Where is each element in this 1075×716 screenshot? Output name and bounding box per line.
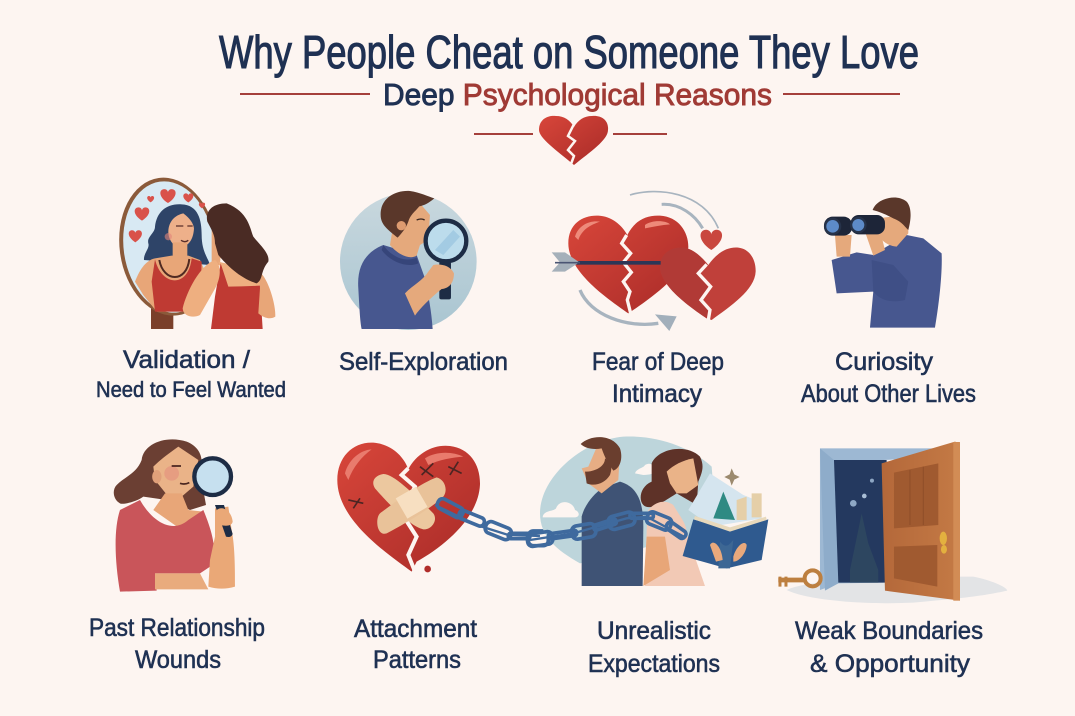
subtitle: Deep Psychological Reasons [383,77,772,112]
icon: mirror with woman [110,171,275,329]
label: past relationship wounds: Past Relationship [89,614,265,642]
label: unrealistic expectations: Expectations [588,650,720,678]
label: fear of deep intimacy [592,348,724,408]
panel: weak boundaries [778,442,1007,678]
label: attachment patterns: Attachment [354,615,477,643]
icon: woman with magnifying glass [114,439,235,592]
label: unrealistic expectations: Unrealistic [597,617,711,645]
panel: validation [96,171,286,402]
icon: broken hearts with arrow [552,192,756,331]
label: weak boundaries: & Opportunity [810,650,971,678]
label: attachment patterns: Patterns [373,646,461,674]
label: unrealistic expectations [588,617,720,678]
label: weak boundaries [795,617,983,678]
label: validation: Validation / [123,346,250,374]
icon: open door and key [778,442,1007,603]
label: self-exploration: Self-Exploration [339,348,508,376]
panel: unrealistic expectations [527,437,768,678]
label: validation: Need to Feel Wanted [96,377,286,402]
label: past relationship wounds: Wounds [135,646,221,674]
label: past relationship wounds [89,614,265,674]
label: curiosity: Curiosity [835,348,933,376]
label: fear of deep intimacy: Fear of Deep [592,348,724,376]
panel: fear of deep intimacy [552,192,756,408]
icon: bandaged broken heart [337,443,548,572]
label: curiosity: About Other Lives [801,380,976,408]
label: weak boundaries: Weak Boundaries [795,617,983,645]
label: fear of deep intimacy: Intimacy [612,380,702,408]
label: attachment patterns [354,615,477,674]
icon: man with magnifying glass [340,191,477,330]
panel: attachment patterns [337,443,548,674]
panel: curiosity [801,198,976,408]
panel: past relationship wounds [89,439,265,674]
panel: self-exploration [339,191,508,376]
icon: couple with chain and book [527,437,768,586]
label: curiosity [801,348,976,408]
icon: broken heart divider [539,116,608,165]
label: validation [96,346,286,402]
icon: man with binoculars [824,198,942,328]
